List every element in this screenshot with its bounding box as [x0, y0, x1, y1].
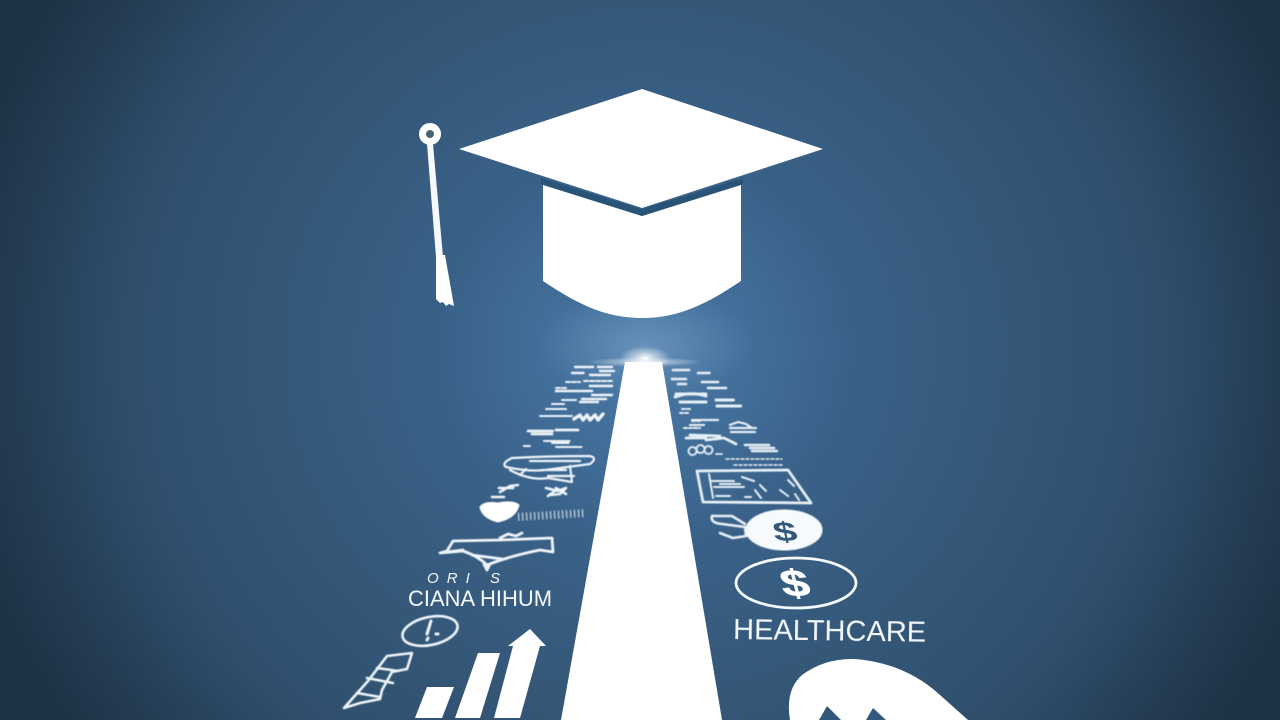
money bag dollar sign: $: [770, 516, 800, 547]
road: [561, 362, 722, 720]
right scribble column: [672, 370, 822, 550]
tassel ring: [422, 126, 438, 142]
healthcare label: HEALTHCARE: [733, 614, 926, 649]
background halo: [535, 290, 755, 400]
left scribble column: [344, 367, 614, 708]
bar small: [415, 687, 454, 718]
handwritten line left: [408, 570, 552, 611]
distant scribbles left: [524, 367, 614, 447]
circled dollar right: $: [775, 562, 814, 604]
road horizon glow: [587, 346, 703, 370]
tassel fringe: [436, 255, 454, 306]
handwritten line left: ORI S: [427, 570, 500, 587]
handwritten line left: CIANA HIHUM: [408, 586, 552, 611]
cap body: [543, 185, 741, 318]
exclamation mark left: [427, 621, 438, 640]
tablet icon right: [697, 470, 811, 503]
heart blob left: [480, 502, 519, 522]
dark peaks inside round shape: [819, 706, 886, 720]
ladder left: [344, 653, 412, 708]
circled dollar right: [736, 558, 856, 608]
cap board: [459, 89, 823, 208]
icon: tassel: [422, 126, 454, 306]
rising bar chart: [415, 629, 546, 718]
bar medium: [455, 653, 500, 718]
cloud scribble left: [504, 456, 594, 482]
emblem left: [440, 533, 553, 570]
money bag right: [712, 510, 822, 550]
dotted caption left: [518, 513, 585, 517]
arrow bar: [494, 629, 546, 718]
cap shadow band: [541, 178, 743, 216]
tassel cord: [427, 144, 443, 257]
icon: large round shape bottom right: [789, 659, 968, 720]
distant scribbles right: [672, 370, 782, 465]
icon: graduation cap: [459, 89, 823, 318]
small marks left: [492, 485, 566, 497]
oval icon left: [400, 611, 460, 651]
